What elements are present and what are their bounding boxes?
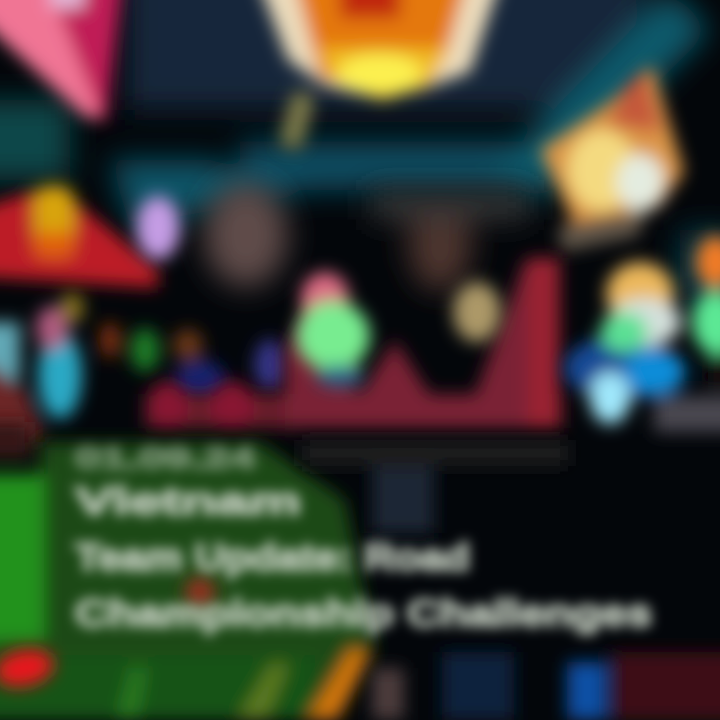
banner: pink pennant top left: [0, 0, 124, 122]
icon: red shape on pitch: [0, 577, 215, 692]
title line 3: Championship Challenges: [75, 593, 652, 635]
emblem: golden crest top centre: [254, 0, 504, 151]
background: dark stands and bottom stripes: [302, 440, 720, 720]
title line 1: Vietnam: [75, 481, 301, 523]
icon: green and pink balloon: [296, 272, 370, 387]
banner: red tent left: [0, 184, 158, 288]
player silhouettes: [204, 183, 530, 291]
crowd: red jerseys: [145, 258, 562, 429]
headline text block: [75, 442, 652, 635]
icon: flame emblem top right: [540, 66, 684, 252]
background: dark teal ceiling: [0, 0, 720, 300]
icon: purple balloon: [136, 196, 180, 260]
icon: tan balloon: [453, 282, 501, 342]
date line: 01.09.24: [75, 442, 255, 475]
title line 2: Team Update: Road: [75, 537, 470, 579]
crowd: colourful fans left: [0, 292, 286, 440]
icon: rainbow balloons right: [564, 236, 720, 432]
panel: green pitch: [0, 422, 375, 720]
